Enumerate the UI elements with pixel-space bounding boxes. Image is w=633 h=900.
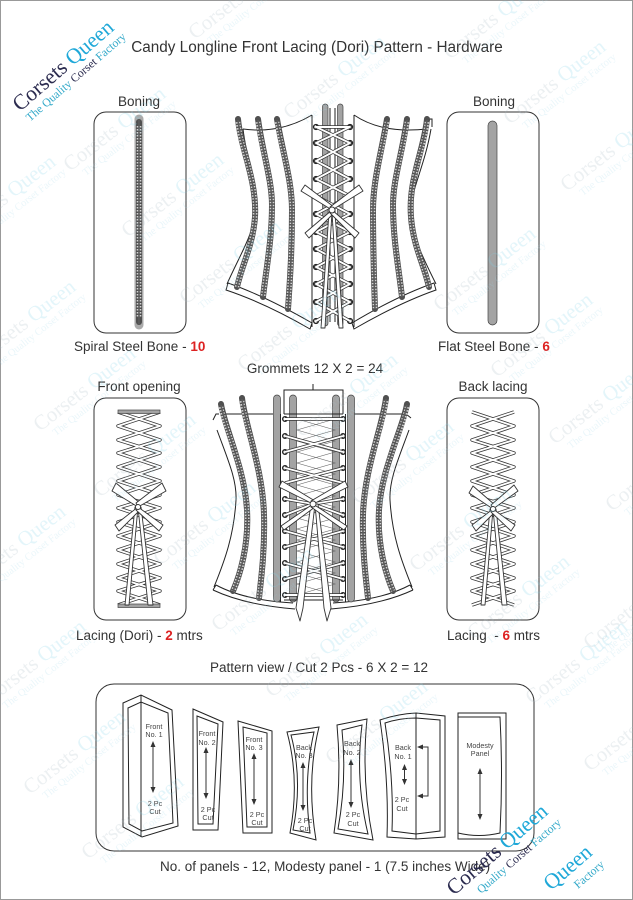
watermarks: Corsets Queen	[278, 29, 390, 124]
piece: front no. 3: No. 3	[245, 743, 263, 752]
panel: spiral steel bone	[74, 94, 205, 354]
piece: back no. 1: No. 1	[394, 752, 412, 761]
watermarks: Corsets Queen	[404, 481, 516, 576]
panel: spiral steel bone: Boning	[118, 94, 160, 109]
panel: back lacing: Back lacing	[458, 379, 528, 394]
piece: front no. 2: 2 Pc	[201, 805, 216, 814]
watermarks: Corsets Queen	[520, 614, 632, 709]
spiral bones: right	[363, 398, 407, 598]
piece: back no. 2: Back	[344, 739, 360, 748]
panel: back lacing: Lacing - 6 mtrs	[447, 628, 540, 643]
piece: modesty panel	[458, 713, 506, 839]
panel: back lacing	[447, 379, 540, 643]
back panel bones and frame	[274, 384, 354, 602]
piece: back no. 3: Back	[296, 743, 312, 752]
watermarks: Corsets Queen	[148, 475, 260, 570]
panel: flat steel bone: Flat Steel Bone - 6	[438, 339, 550, 354]
lacing	[285, 419, 343, 595]
watermarks: Corsets Queen	[58, 81, 170, 176]
panel: front opening lacing: Lacing (Dori) - 2 mtrs	[76, 628, 203, 643]
label: grommets: Grommets 12 X 2 = 24	[247, 361, 384, 376]
label: pattern view: Pattern view / Cut 2 Pcs - 6 X 2 = 12	[210, 660, 428, 675]
bow and tails	[301, 185, 363, 328]
label: number of panels: No. of panels - 12, Modesty panel - 1 (7.5 inches Wide)	[160, 859, 490, 874]
panel: spiral steel bone: Spiral Steel Bone - 10	[74, 339, 205, 354]
piece: back no. 3: Cut	[299, 824, 311, 833]
logo: top left: Corsets Queen	[8, 15, 119, 116]
watermarks: Corsets Queen	[462, 549, 574, 644]
spiral bones: left	[221, 398, 264, 598]
logo: bottom right second: Factory	[571, 858, 607, 891]
watermarks: Corsets Queen	[260, 607, 372, 702]
piece: back no. 1: 2 Pc	[395, 795, 410, 804]
piece: front no. 2	[193, 709, 223, 830]
watermarks: The Quality Corset Factory	[283, 624, 381, 704]
panel: front opening lacing	[76, 379, 203, 643]
title: Candy Longline Front Lacing (Dori) Pattern - Hardware	[131, 39, 503, 56]
modesty panel lacing	[297, 419, 335, 595]
lacing	[316, 127, 350, 321]
piece: front no. 2: Front	[199, 729, 215, 738]
piece: back no. 2: No. 2	[343, 748, 361, 757]
piece: back no. 2: 2 Pc	[346, 810, 361, 819]
watermarks: The Quality Corset Factory	[369, 431, 467, 511]
watermarks: The Quality Corset Factory	[508, 304, 606, 384]
piece: back no. 3: 2 Pc	[298, 816, 313, 825]
watermarks: The Quality Corset Factory	[139, 164, 237, 244]
piece: front no. 1: No. 1	[145, 730, 163, 739]
watermarks: Corsets Queen	[232, 281, 344, 376]
watermarks: The Quality Corset Factory	[485, 566, 583, 646]
panel: flat steel bone: Boning	[473, 94, 515, 109]
piece: front no. 1: Cut	[149, 807, 161, 816]
logo: bottom right: Corsets Queen	[442, 799, 553, 900]
piece: front no. 3: 2 Pc	[250, 810, 265, 819]
watermarks: The Quality Corset Factory	[521, 51, 619, 131]
corset: front view with front lacing	[226, 104, 436, 329]
piece: front no. 3: Cut	[251, 818, 263, 827]
watermarks: The Quality Corset Factory	[313, 364, 411, 444]
watermarks: The Quality Corset Factory	[197, 231, 295, 311]
panel: front opening lacing: Front opening	[97, 379, 181, 394]
piece: front no. 2: Cut	[202, 813, 214, 822]
watermarks: Corsets Queen	[174, 214, 286, 309]
logo: bottom right: Quality Corset Factory	[474, 816, 564, 896]
grommets	[283, 417, 345, 597]
piece: back no. 3: No. 3	[295, 751, 313, 760]
watermarks: Corsets Queen	[116, 147, 228, 242]
piece: back no. 3	[287, 727, 319, 840]
corset: back view with back lacing	[213, 384, 413, 621]
watermarks: Corsets Queen	[320, 674, 432, 769]
piece: back no. 1: Back	[395, 743, 411, 752]
logo: top left: The Quality Corset Factory	[23, 30, 129, 124]
panel: pattern pieces	[96, 684, 534, 851]
piece: modesty panel: Modesty	[466, 741, 494, 750]
piece: back no. 2	[334, 719, 373, 840]
centre front panel	[312, 104, 354, 327]
piece: back no. 1: Cut	[396, 804, 408, 813]
watermarks: Corsets Queen	[76, 769, 188, 864]
watermarks: The Quality Corset Factory	[1, 631, 99, 711]
spiral bones: left	[237, 119, 292, 309]
watermarks: The Quality Corset Factory	[111, 424, 209, 504]
watermarks: The Quality Corset Factory	[171, 492, 269, 572]
watermarks: Corsets Queen	[28, 341, 140, 436]
piece: front no. 1: 2 Pc	[148, 799, 163, 808]
piece: front no. 2: No. 2	[198, 738, 216, 747]
watermarks: Corsets Queen	[346, 414, 458, 509]
watermarks: The Quality Corset Factory	[81, 98, 179, 178]
piece: back no. 1	[380, 713, 445, 839]
watermarks: The Quality Corset Factory	[99, 786, 197, 866]
watermarks: The Quality Corset Factory	[427, 498, 525, 578]
watermarks: Corsets Queen	[290, 347, 402, 442]
piece: front no. 1: Front	[146, 722, 162, 731]
piece: front no. 1	[123, 695, 178, 837]
watermarks: The Quality Corset Factory	[41, 721, 139, 801]
grommets	[314, 125, 352, 323]
panel: flat steel bone	[438, 94, 550, 354]
watermarks: Corsets Queen	[18, 704, 130, 799]
bow and tails	[279, 481, 348, 621]
watermarks: Corsets Queen	[498, 34, 610, 129]
watermarks: Corsets Queen	[485, 287, 597, 382]
piece: modesty panel: Panel	[471, 749, 490, 758]
watermarks: The Quality Corset Factory	[301, 46, 399, 126]
watermarks: Corsets Queen	[206, 541, 318, 636]
piece: back no. 2: Cut	[347, 819, 359, 828]
watermarks: The Quality Corset Factory	[51, 358, 149, 438]
watermarks: The Quality Corset Factory	[255, 298, 353, 378]
watermarks: The Quality Corset Factory	[451, 238, 549, 318]
watermarks: Corsets Queen	[428, 221, 540, 316]
piece: front no. 3: Front	[246, 735, 262, 744]
piece: front no. 3	[238, 721, 272, 833]
logo: bottom right second: Queen	[539, 840, 597, 895]
watermarks: The Quality Corset Factory	[343, 691, 441, 771]
watermarks: The Quality Corset Factory	[229, 558, 327, 638]
spiral bones: right	[373, 119, 429, 309]
watermarks: Corsets Queen	[88, 407, 200, 502]
